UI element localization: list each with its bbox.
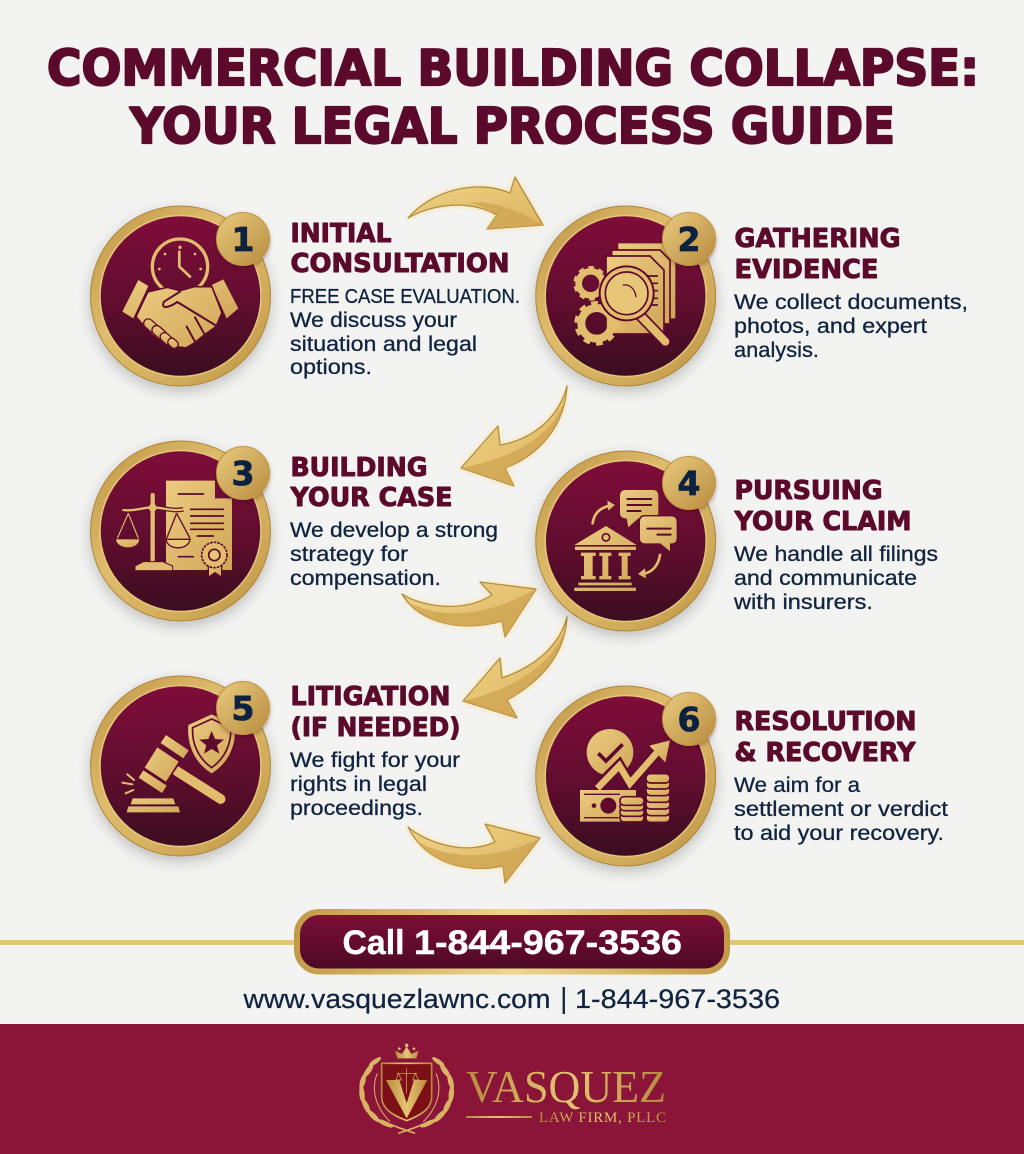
icon disc: step 1 [90,206,270,386]
footer band [0,1024,1024,1154]
title: COMMERCIAL BUILDING COLLAPSE: [47,40,979,97]
heading: resolution and recovery: & RECOVERY [734,738,917,768]
panel: step 6 [536,686,948,866]
number badge 1 [216,212,270,266]
call button [297,912,727,972]
number badge 5 [216,682,270,734]
icon disc: step 6 [536,686,716,866]
text: step 3 description: strategy for [290,542,408,566]
heading: initial consultation: INITIAL [290,219,392,249]
number badge 2 [662,212,716,266]
number badge 4 [662,456,716,510]
logo crest [358,1044,455,1133]
number badge 6 [662,692,716,746]
text: step 2 description [734,290,968,362]
heading: initial consultation [290,219,510,279]
text: step 4 description: and communicate [734,566,917,590]
text: step 1 description: FREE CASE EVALUATION. [290,286,520,308]
heading: gathering evidence [734,224,900,285]
heading: litigation: (IF NEEDED) [290,713,460,743]
icon disc: step 3 [90,441,270,621]
heading: pursuing your claim: YOUR CLAIM [734,507,912,537]
contact line: 1-844-967-3536 [575,984,780,1014]
icon: courthouse and chat bubbles [574,490,677,591]
heading: initial consultation: CONSULTATION [290,249,510,279]
heading: building your case [290,453,452,513]
heading: resolution and recovery [734,707,917,768]
text: step 1 description: We discuss your [290,308,457,332]
logo tagline: LAW FIRM, PLLC [539,1110,666,1126]
logo: Vasquez Law Firm [358,1044,666,1133]
title [47,40,979,155]
text: step 3 description: compensation. [290,566,441,590]
contact line: | [560,983,568,1015]
text: step 2 description: photos, and expert [734,314,927,338]
icon: scales and certificate [116,481,232,577]
text: step 3 description: We develop a strong [290,518,498,542]
call button: Call [342,924,404,962]
text: step 6 description: to aid your recovery. [734,821,944,845]
text: step 1 description: situation and legal [290,332,477,356]
text: step 4 description: We handle all filings [734,542,938,566]
text: step 6 description: We aim for a [734,773,860,797]
panel: step 2 [536,206,968,386]
text: step 6 description: settlement or verdict [734,797,948,821]
icon: clock and handshake [122,239,238,350]
contact line [242,983,780,1015]
heading: pursuing your claim [734,476,912,537]
heading: litigation: LITIGATION [290,682,450,712]
panel: step 5 [90,676,460,856]
arrow: step 3 to step 4 [402,582,536,637]
number badge 3: 3 [232,454,254,493]
heading: building your case: YOUR CASE [290,483,452,513]
number badge 4: 4 [678,464,700,503]
title: YOUR LEGAL PROCESS GUIDE [129,98,895,155]
heading: gathering evidence: GATHERING [734,224,900,254]
text: step 5 description [290,748,460,820]
heading: resolution and recovery: RESOLUTION [734,707,916,737]
icon: gavel and shield [122,714,235,812]
number badge 5: 5 [232,689,254,728]
text: step 6 description [734,773,948,845]
heading: litigation [290,682,460,743]
call button: 1-844-967-3536 [414,924,682,962]
panel: step 4 [536,451,938,631]
icon disc: step 5 [90,676,270,856]
icon disc: step 4 [536,451,716,631]
number badge 6: 6 [678,700,700,739]
text: step 3 description [290,518,498,590]
text: step 2 description: We collect documents, [734,290,968,314]
icon: check, growth arrow, money and coins [580,729,670,822]
arrow: step 1 to step 2 [408,177,543,229]
text: step 5 description: proceedings. [290,796,423,820]
arrow: step 2 to step 3 [461,386,567,486]
text: step 1 description [290,286,520,379]
heading: gathering evidence: EVIDENCE [734,255,878,285]
text: step 1 description: options. [290,355,372,379]
icon disc: step 2 [536,206,716,386]
text: step 4 description [733,542,938,614]
logo wordmark: VASQUEZ [466,1061,666,1112]
panel: step 1 [90,206,520,386]
number badge 1: 1 [232,220,254,259]
contact line: www.vasquezlawnc.com [242,984,551,1014]
panel: step 3 [90,441,498,621]
heading: building your case: BUILDING [290,453,428,483]
heading: pursuing your claim: PURSUING [734,476,882,506]
text: step 5 description: We fight for your [290,748,460,772]
text: step 2 description: analysis. [734,338,819,362]
arrow: step 5 to step 6 [408,824,540,883]
number badge 3 [216,446,270,500]
number badge 2: 2 [678,220,700,259]
text: step 5 description: rights in legal [290,772,427,796]
text: step 4 description: with insurers. [733,590,873,614]
icon: documents, gears and magnifier [575,243,675,343]
arrow: step 4 to step 5 [463,617,567,718]
